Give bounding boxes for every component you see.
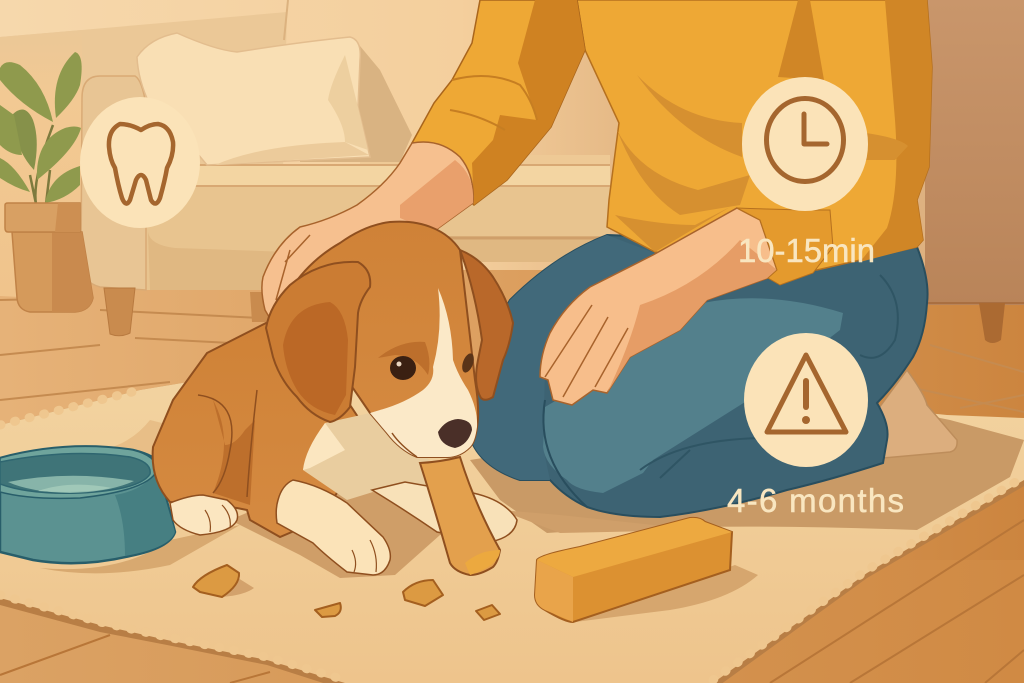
chew crumbs [193, 565, 500, 620]
sofa arm [81, 76, 146, 290]
chew held by puppy [420, 457, 500, 575]
age label: 4-6 months [727, 482, 904, 519]
potted plant [0, 52, 93, 312]
left ear [266, 262, 370, 422]
front paw [276, 480, 390, 575]
puppy [153, 222, 517, 575]
head [290, 222, 478, 457]
nose [438, 419, 472, 448]
pillow shadow [300, 40, 412, 162]
muzzle [370, 288, 477, 457]
rug shade [470, 400, 1024, 533]
right ear [460, 250, 513, 400]
icon: clock [742, 77, 868, 211]
chest [303, 413, 440, 505]
eyes [390, 356, 416, 380]
icon: tooth [80, 97, 200, 228]
back leg [372, 482, 517, 542]
sofa cushion [137, 33, 370, 165]
sofa [0, 0, 1024, 343]
sleeve [412, 0, 585, 205]
arm to knee [540, 208, 777, 405]
large chew stick [535, 518, 732, 622]
duration label: 10-15min [738, 232, 875, 269]
jeans knee highlight [468, 235, 660, 480]
rug [0, 380, 1024, 683]
person [262, 0, 957, 517]
cuff [737, 208, 833, 285]
foot [870, 370, 957, 458]
arm on puppy [262, 142, 473, 322]
water bowl [0, 446, 175, 563]
jeans [468, 235, 928, 517]
sofa legs [104, 288, 135, 336]
right sofa [925, 0, 1024, 305]
icon: warning [744, 333, 868, 467]
brow shade [378, 342, 429, 375]
sweater [577, 0, 932, 270]
body [153, 323, 360, 537]
rear paw [170, 495, 238, 535]
